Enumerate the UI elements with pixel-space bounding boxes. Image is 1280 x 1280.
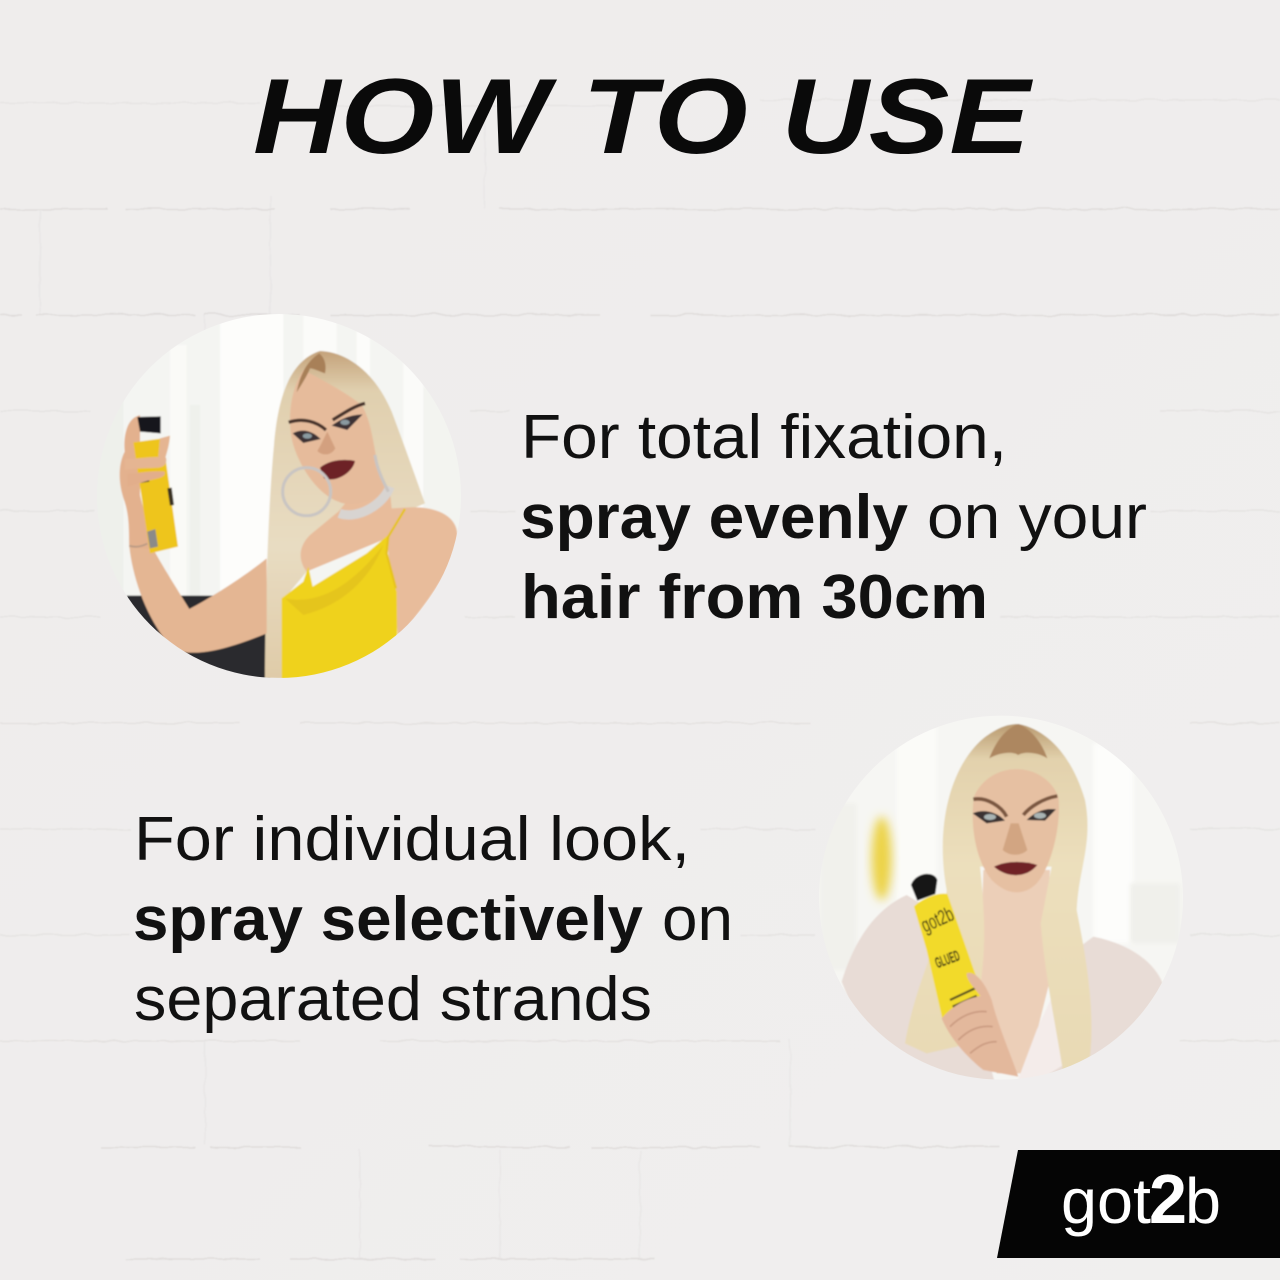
spray can: GLUED [933, 948, 962, 972]
robe [842, 895, 1163, 1090]
text block: first instruction: For total fixation, [521, 403, 1007, 472]
yellow dress [282, 536, 397, 680]
neck and chest [980, 870, 1057, 1073]
text block: second instruction: on [662, 885, 733, 954]
face [973, 769, 1059, 892]
text block: second instruction: spray selectively [133, 885, 644, 954]
hair [905, 724, 1091, 1073]
spray can [911, 874, 982, 1030]
text block: second instruction: separated strands [134, 965, 652, 1034]
text block: first instruction: hair from 30cm [521, 563, 988, 632]
text block: first instruction: on your [927, 483, 1147, 552]
title: HOW TO USE [253, 56, 1034, 176]
photo background curtains [124, 314, 424, 678]
logo badge: got2b: b [1185, 1165, 1221, 1237]
face [289, 353, 387, 504]
text block: second instruction [133, 805, 733, 1034]
photo background [836, 716, 1160, 1079]
arm and hand [120, 415, 267, 653]
text block: first instruction [520, 403, 1147, 632]
text block: first instruction: spray evenly [520, 483, 909, 552]
logo badge: got2b: 2 [1149, 1160, 1187, 1238]
logo badge: got2b [997, 1150, 1280, 1258]
spray can [132, 416, 179, 554]
logo badge: got2b: got [1061, 1165, 1151, 1237]
spray can: got2b [918, 903, 957, 937]
photo: woman spraying can [118, 314, 458, 678]
photo: woman holding can [836, 716, 1162, 1080]
neck, shoulder and chest [301, 492, 457, 638]
hand [942, 973, 1018, 1077]
text block: second instruction: For individual look, [134, 805, 690, 874]
jewelry [129, 455, 390, 547]
hair [265, 351, 425, 678]
